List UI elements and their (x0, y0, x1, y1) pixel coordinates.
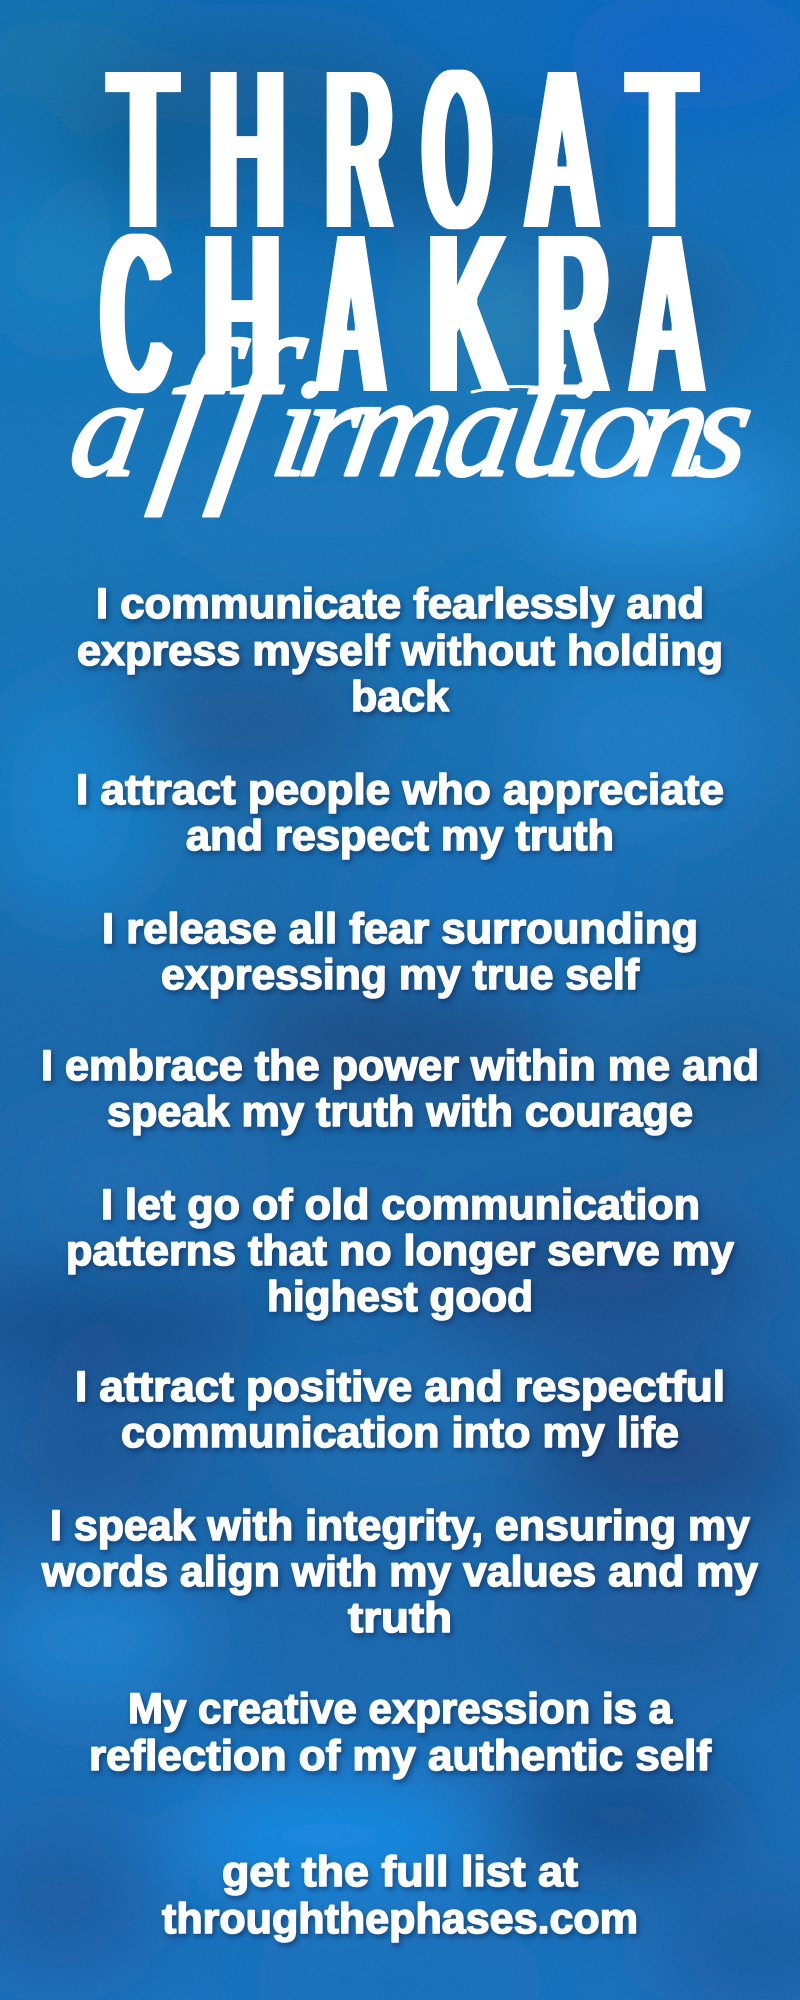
title: THROAT: H (209, 20, 285, 280)
title: CHAKRA (101, 182, 704, 445)
title: THROAT: R (326, 18, 392, 280)
title: affirmations script: s (683, 350, 765, 506)
title: CHAKRA: R (538, 184, 608, 445)
title: affirmations script: f (200, 301, 316, 518)
title: affirmations script: i (537, 350, 603, 506)
affirmation 5: I let go of old communication (101, 1181, 700, 1229)
footer call to action (162, 1848, 638, 1943)
title: CHAKRA: K (428, 182, 508, 444)
title: affirmations script: o (569, 350, 666, 506)
affirmation 8 (89, 1685, 712, 1780)
affirmation 4: speak my truth with courage (107, 1088, 693, 1136)
affirmation 2: I attract people who appreciate (76, 766, 724, 814)
affirmation 3: expressing my true self (161, 951, 640, 999)
title: affirmations script (58, 301, 773, 518)
title: affirmations script: n (625, 350, 722, 506)
title: THROAT: T (628, 18, 696, 280)
footer call to action: get the full list at (222, 1848, 578, 1896)
affirmation 5 (66, 1181, 734, 1321)
affirmation 4: I embrace the power within me and (41, 1042, 759, 1090)
title: affirmations script: r (291, 350, 374, 506)
affirmation 1: express myself without holding (77, 627, 723, 675)
affirmation 2: and respect my truth (186, 812, 614, 860)
title: CHAKRA: C (101, 182, 171, 444)
affirmation 3: I release all fear surrounding (102, 905, 698, 953)
affirmation 4 (41, 1042, 759, 1136)
affirmation 1: I communicate fearlessly and (96, 580, 704, 628)
affirmation 8: reflection of my authentic self (89, 1732, 712, 1780)
affirmation 3 (102, 905, 698, 999)
title: CHAKRA: A (317, 182, 385, 444)
affirmation 1: back (351, 673, 449, 721)
affirmation 5: patterns that no longer serve my (66, 1227, 734, 1275)
affirmation 7: I speak with integrity, ensuring my (50, 1502, 750, 1550)
affirmation 7 (41, 1502, 758, 1642)
title: affirmations script: m (334, 346, 467, 507)
title: THROAT: O (423, 19, 491, 280)
affirmation 7: words align with my values and my (41, 1548, 758, 1596)
title: CHAKRA: H (204, 182, 280, 444)
title: affirmations script: a (435, 350, 532, 506)
title: affirmations script: a (61, 350, 158, 506)
affirmation 6: I attract positive and respectful (75, 1363, 725, 1411)
affirmation 1 (77, 580, 723, 721)
title: THROAT: T (109, 18, 177, 280)
affirmation 2 (76, 766, 724, 860)
footer call to action: throughthephases.com (162, 1895, 638, 1943)
title: affirmations script: t (497, 301, 594, 518)
title: CHAKRA: A (630, 183, 704, 444)
title: THROAT: A (525, 20, 599, 281)
title: affirmations script: i (263, 350, 329, 506)
affirmation 7: truth (348, 1594, 452, 1642)
title: affirmations script: f (142, 301, 258, 518)
affirmation 6 (75, 1363, 725, 1457)
affirmation 6: communication into my life (121, 1409, 679, 1457)
affirmation 8: My creative expression is a (128, 1685, 673, 1733)
title: THROAT (109, 18, 696, 281)
affirmation 5: highest good (267, 1273, 533, 1321)
